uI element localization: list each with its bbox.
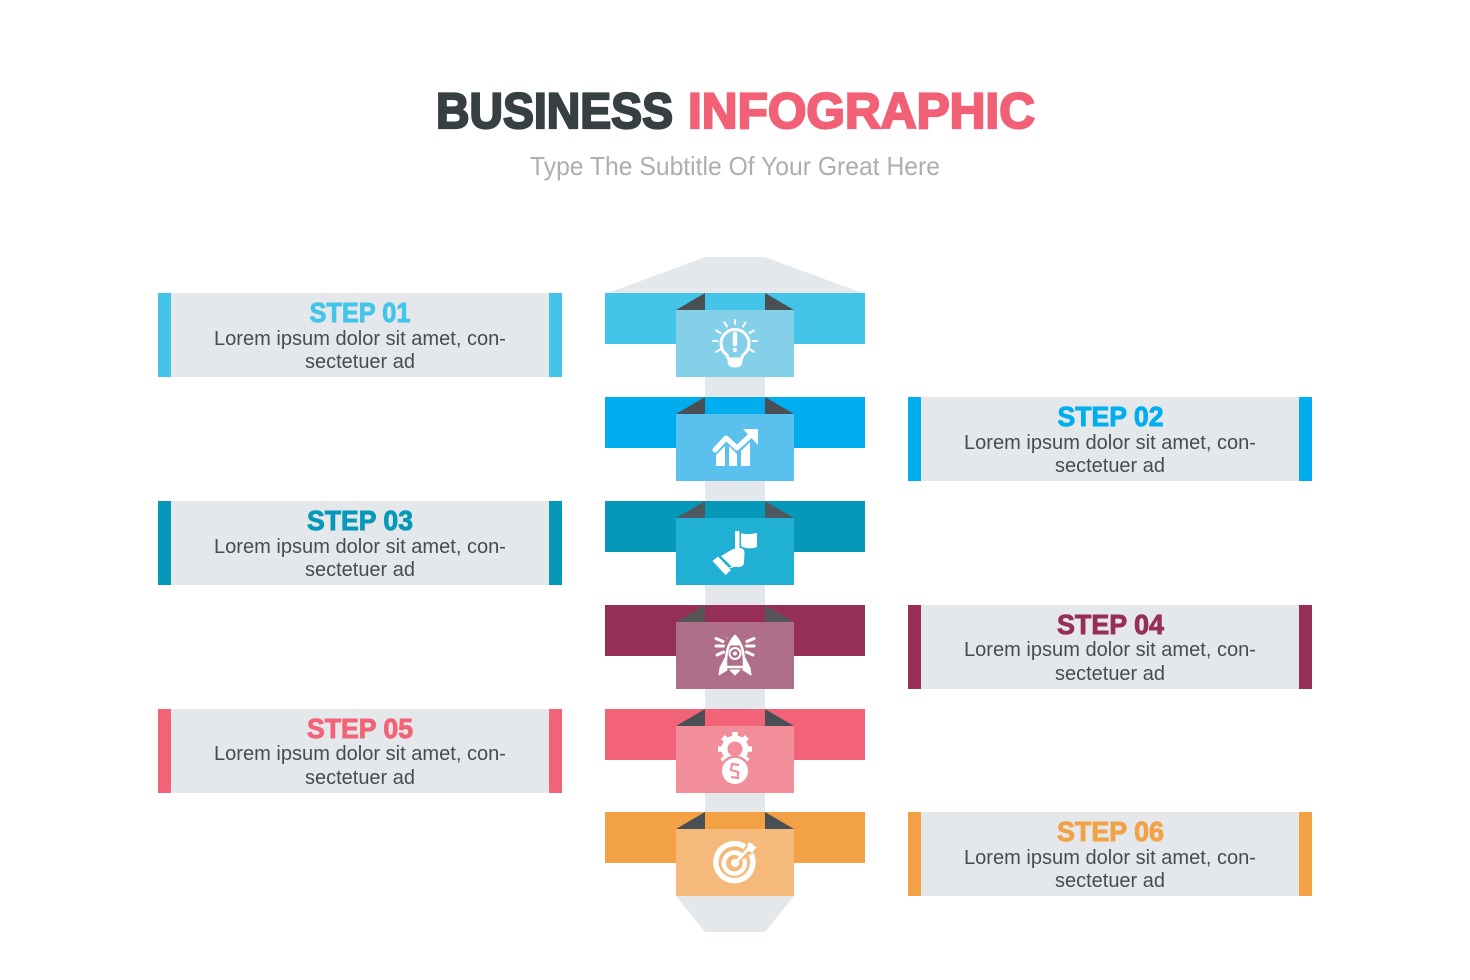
panel: step 01: Lorem ipsum dolor sit amet, con- — [214, 328, 506, 350]
panel: step 04: STEP 04 — [1057, 609, 1164, 640]
title: BUSINESS — [436, 83, 673, 139]
panel: step 03: STEP 03 — [307, 505, 413, 536]
icon: light bulb — [713, 320, 757, 367]
panel: step 05 — [158, 709, 562, 793]
panel: step 05: STEP 05 — [307, 713, 413, 744]
central gray column with arrow ends — [608, 257, 862, 932]
panel: step 06 — [908, 812, 1312, 896]
panel: step 06: STEP 06 — [1057, 816, 1164, 847]
icon: rocket — [716, 636, 754, 675]
step 04 band — [605, 605, 865, 689]
step 06 band — [605, 812, 865, 896]
panel: step 02: STEP 02 — [1058, 401, 1164, 432]
icon: hand with flag — [712, 531, 757, 575]
panel: step 06: sectetuer ad — [1055, 870, 1165, 892]
step 05 band — [605, 709, 865, 793]
panel: step 05: sectetuer ad — [305, 767, 415, 789]
panel: step 04: sectetuer ad — [1055, 663, 1165, 685]
step 02 band — [605, 397, 865, 481]
subtitle: Type The Subtitle Of Your Great Here — [530, 151, 940, 181]
icon: target — [716, 843, 756, 881]
panel: step 06: Lorem ipsum dolor sit amet, con- — [964, 847, 1256, 869]
panel: step 02 — [908, 397, 1312, 481]
icon: gear and coin — [718, 732, 752, 786]
panel: step 03: Lorem ipsum dolor sit amet, con- — [214, 536, 506, 558]
icon: growth chart — [715, 429, 758, 466]
panel: step 03 — [158, 501, 562, 585]
title: INFOGRAPHIC — [688, 83, 1035, 139]
title — [436, 83, 1035, 139]
step 03 band — [605, 501, 865, 585]
panel: step 03: sectetuer ad — [305, 559, 415, 581]
panel: step 02: sectetuer ad — [1055, 455, 1165, 477]
panel: step 04: Lorem ipsum dolor sit amet, con- — [964, 639, 1256, 661]
panel: step 01 — [158, 293, 562, 377]
panel: step 02: Lorem ipsum dolor sit amet, con- — [964, 432, 1256, 454]
step 01 band — [605, 293, 865, 377]
panel: step 05: Lorem ipsum dolor sit amet, con- — [214, 743, 506, 765]
panel: step 01: sectetuer ad — [305, 351, 415, 373]
panel: step 04 — [908, 605, 1312, 689]
panel: step 01: STEP 01 — [310, 297, 410, 328]
